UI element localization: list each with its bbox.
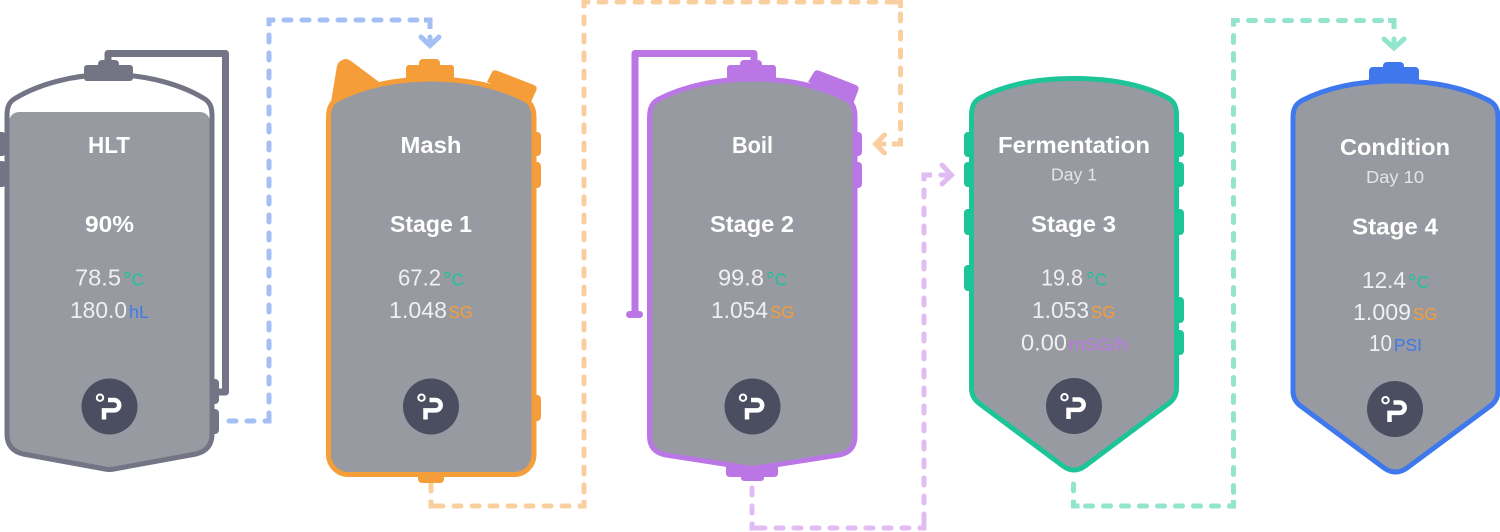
Boil fittings <box>726 60 862 481</box>
Fermentation day: Day 1 <box>1051 164 1097 184</box>
Boil title: Boil <box>732 132 773 158</box>
Condition vessel <box>1293 81 1498 472</box>
Fermentation gravity: SG <box>1091 302 1116 322</box>
Mash gravity: 1.048 <box>389 297 447 323</box>
connector: Mash to Boil <box>431 2 900 506</box>
Fermentation temperature: C <box>1095 270 1107 290</box>
Mash gravity: SG <box>448 302 473 322</box>
Mash fittings <box>331 59 541 483</box>
HLT volume: hL <box>129 302 149 322</box>
Mash temperature <box>398 264 464 292</box>
Condition pressure: PSI <box>1394 335 1422 355</box>
Boil temperature <box>718 264 787 292</box>
Mash temperature: C <box>452 270 464 290</box>
Condition gravity <box>1353 299 1438 325</box>
connector: Boil to Fermentation <box>752 165 952 528</box>
panel: Mash tank <box>328 59 541 483</box>
Mash temperature: ° <box>443 268 452 292</box>
Condition day: Day 10 <box>1366 167 1424 187</box>
panel: Fermentation tank <box>964 78 1184 470</box>
HLT temperature <box>75 264 144 292</box>
Mash gravity <box>389 297 473 323</box>
Boil gravity: SG <box>770 302 794 322</box>
Fermentation gravity <box>1032 297 1116 323</box>
HLT recirculation pipe <box>108 54 226 392</box>
Condition top fitting <box>1369 62 1419 85</box>
icon: Mash logo <box>403 378 459 434</box>
icon: Condition logo <box>1367 381 1423 437</box>
Boil temperature: C <box>775 270 787 290</box>
connector: Fermentation to Condition <box>1074 20 1404 506</box>
Condition pressure: 10 <box>1369 330 1392 356</box>
Boil gravity <box>711 297 794 323</box>
Boil return pipe <box>626 54 754 318</box>
icon: Boil logo <box>724 378 780 434</box>
HLT fittings <box>0 60 219 434</box>
Condition gravity: 1.009 <box>1353 299 1411 325</box>
Fermentation vessel <box>972 78 1176 470</box>
HLT volume: 180.0 <box>70 297 127 323</box>
panel: Condition tank <box>1293 62 1498 472</box>
Boil vessel <box>650 79 855 468</box>
Mash stage: Stage 1 <box>390 211 472 237</box>
Fermentation temperature: ° <box>1086 268 1095 292</box>
Condition stage: Stage 4 <box>1352 214 1438 240</box>
HLT temperature: ° <box>123 268 132 292</box>
Fermentation gravity rate <box>1021 330 1128 356</box>
Condition temperature: 12.4 <box>1362 267 1406 293</box>
Condition title: Condition <box>1340 134 1450 160</box>
Fermentation temperature: 19.8 <box>1041 264 1083 290</box>
Fermentation gravity: 1.053 <box>1032 297 1089 323</box>
connector: HLT to Mash <box>219 20 439 421</box>
Condition gravity: SG <box>1413 304 1438 324</box>
Condition temperature: C <box>1417 272 1429 292</box>
panel: HLT tank <box>0 54 226 470</box>
HLT fill level: 90% <box>85 211 134 237</box>
Boil stage: Stage 2 <box>710 211 794 237</box>
Boil temperature: 99.8 <box>718 264 764 290</box>
HLT vessel outline <box>7 74 212 470</box>
Fermentation title: Fermentation <box>998 132 1150 158</box>
Boil gravity: 1.054 <box>711 297 768 323</box>
Fermentation side fittings <box>964 132 1184 355</box>
HLT title: HLT <box>88 132 131 158</box>
Fermentation gravity rate: mSG/h <box>1069 334 1128 354</box>
Fermentation stage: Stage 3 <box>1031 211 1116 237</box>
Mash title: Mash <box>400 132 462 158</box>
Condition pressure <box>1369 330 1422 356</box>
Fermentation gravity rate: 0.00 <box>1021 330 1067 356</box>
HLT liquid fill <box>9 112 210 468</box>
panel: Boil tank <box>626 54 862 481</box>
Condition temperature: ° <box>1408 270 1417 295</box>
Fermentation temperature <box>1041 264 1107 292</box>
HLT temperature: 78.5 <box>75 264 121 290</box>
HLT temperature: C <box>132 270 144 290</box>
Boil temperature: ° <box>766 268 775 292</box>
icon: HLT logo <box>82 378 138 434</box>
Condition temperature <box>1362 267 1429 295</box>
Mash temperature: 67.2 <box>398 264 441 290</box>
icon: Fermentation logo <box>1046 378 1102 434</box>
Mash vessel <box>328 79 534 475</box>
